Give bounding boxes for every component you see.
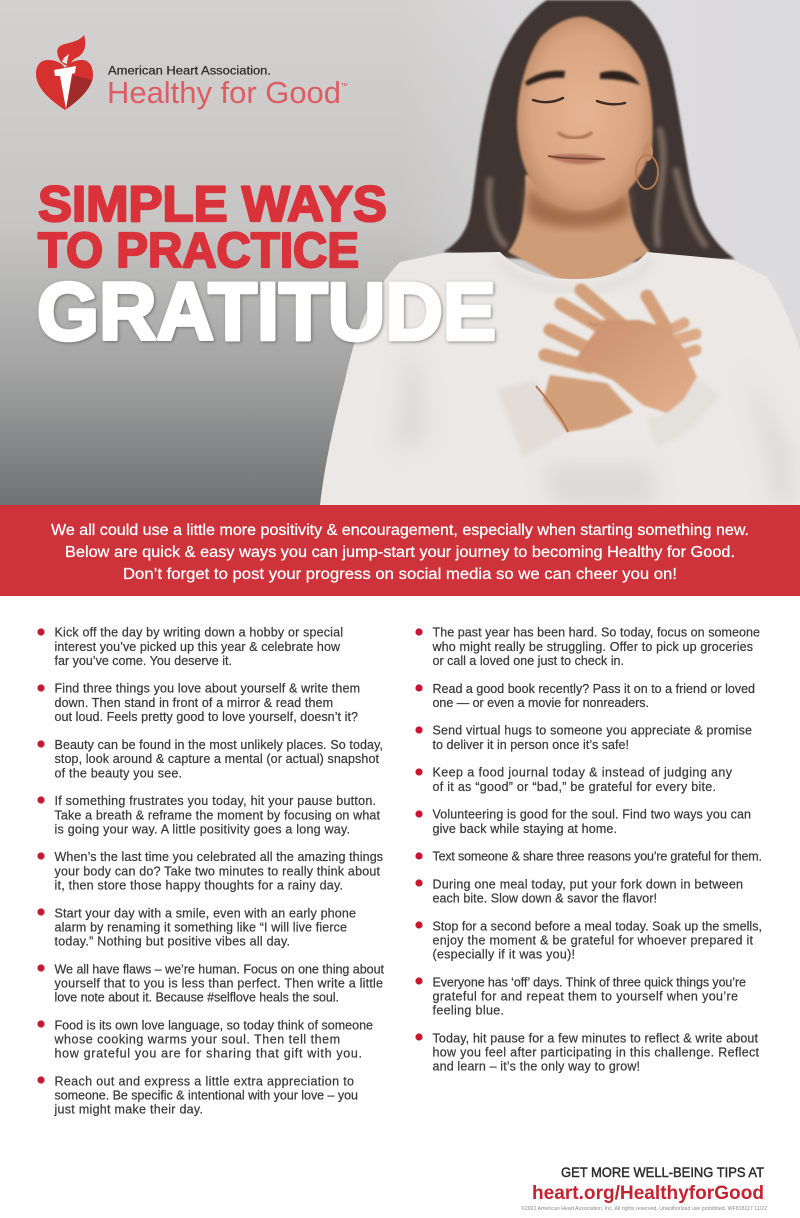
tip: pause button [37, 794, 381, 836]
cuff left [497, 380, 567, 457]
footer heading: GET MORE WELL-BEING TIPS AT [561, 1164, 764, 1180]
trademark: TM [341, 82, 348, 87]
tip: love yourself: out loud. Feels pretty good to love yourself, doesn’t it? [54, 710, 358, 724]
footer call to action [521, 1164, 767, 1212]
neck shadow [527, 185, 630, 228]
nose [558, 132, 592, 138]
footer url: heart.org/HealthyforGood [532, 1182, 764, 1204]
top hand palm [575, 320, 697, 413]
tip: flaws [37, 962, 385, 1004]
tip: beauty: of the beauty you see. [54, 766, 182, 780]
bracelet [536, 386, 568, 432]
copyright: ©2022 American Heart Association, Inc. All rights reserved. Unauthorized use prohibited. WF818117 11/22 [521, 1205, 767, 1212]
tip: off days: grateful for and repeat them to yourself when you’re [432, 990, 738, 1004]
tip: virtual hugs: Send virtual hugs to someone you appreciate & promise [432, 724, 752, 738]
forearm [543, 375, 633, 432]
logo text: Healthy for Good: Healthy for Good [107, 75, 341, 110]
closed eyes [533, 98, 625, 104]
tip: text someone: Text someone & share three reasons you’re grateful for them. [432, 850, 762, 864]
tip: beauty: Beauty can be found in the most unlikely places. So today, [54, 738, 383, 752]
top hand fingers and thumb [545, 290, 667, 367]
tip: food journal: Keep a food journal today & instead of judging any [432, 766, 733, 780]
tip: food journal: of it as “good” or “bad,” be grateful for every bite. [432, 780, 716, 794]
tip: good book [415, 682, 755, 710]
tip: virtual hugs [415, 724, 752, 752]
panel: right column tips [415, 626, 762, 1074]
earring [636, 155, 658, 189]
tip: food [37, 1018, 373, 1060]
lower hand fingers [670, 323, 696, 355]
tip: reflect [415, 1032, 760, 1074]
tip: good book: one — or even a movie for nonreaders. [432, 696, 649, 710]
tip: good book: Read a good book recently? Pass it on to a friend or loved [432, 682, 755, 696]
tip: smile [37, 906, 356, 948]
panel: left column tips [37, 626, 385, 1116]
ear [643, 143, 653, 161]
tip: someone struggling [415, 626, 760, 668]
tip: body: it, then store those happy thoughts for a rainy day. [54, 878, 343, 892]
neck [508, 175, 650, 282]
tip: food: whose cooking warms your soul. Then tell them [54, 1032, 340, 1046]
tip: someone struggling: or call a loved one just to check in. [432, 654, 624, 668]
tip: smile: today.” Nothing but positive vibes all day. [54, 934, 290, 948]
tip: beauty [37, 738, 383, 780]
ring [589, 322, 598, 325]
title line 2: TO PRACTICE [38, 224, 359, 278]
tip: appreciation: just might make their day. [54, 1102, 203, 1116]
tip: appreciation: someone. Be specific & intentional with your love – you [54, 1088, 358, 1102]
title line 3: GRATITUDE: GRATITUDE [37, 266, 496, 358]
tip: virtual hugs: to deliver it in person once it’s safe! [432, 738, 629, 752]
tip: food: Food is its own love language, so today think of someone [54, 1018, 373, 1032]
hands over heart [543, 290, 697, 432]
tip: off days [415, 976, 746, 1018]
face [517, 17, 653, 210]
tip: volunteering: Volunteering is good for the soul. Find two ways you can [432, 808, 751, 822]
icon: heart and torch [36, 35, 93, 110]
tip: soak up the smells [415, 920, 762, 962]
cuff right [647, 377, 720, 447]
tip: beauty: stop, look around & capture a mental (or actual) snapshot [54, 752, 380, 766]
tip: pause button: If something frustrates you today, hit your pause button. [54, 794, 376, 808]
title [37, 176, 496, 358]
tip: pause button: is going your way. A little positivity goes a long way. [54, 822, 350, 836]
tip: reflect: Today, hit pause for a few minutes to reflect & write about [432, 1032, 759, 1046]
eyebrows [525, 71, 640, 86]
tip: love yourself: down. Then stand in front of a mirror & read them [54, 696, 333, 710]
tip: flaws: love note about it. Because #selflove heals the soul. [54, 990, 339, 1004]
sweater [320, 252, 800, 505]
tip: off days: feeling blue. [432, 1004, 504, 1018]
panel: red intro banner: Below are quick & easy ways you can jump-start your journey to becoming Healthy for Good. [65, 544, 735, 561]
hero photo background [0, 0, 800, 505]
tip: fork down [415, 878, 743, 906]
tip: hobby: Kick off the day by writing down a hobby or special [54, 626, 343, 640]
tip: reflect: how you feel after participating in this challenge. Reflect [432, 1046, 760, 1060]
tip: love yourself: Find three things you love about yourself & write them [54, 682, 360, 696]
tip: hobby: interest you’ve picked up this year & celebrate how [54, 640, 341, 654]
tip: someone struggling: who might really be struggling. Offer to pick up groceries [432, 640, 753, 654]
logo: American Heart Association Healthy for Good [36, 35, 348, 110]
tip: reflect: and learn – it’s the only way to grow! [432, 1060, 640, 1074]
tip: fork down: During one meal today, put your fork down in between [432, 878, 743, 892]
tip: flaws: We all have flaws – we’re human. Focus on one thing about [54, 962, 385, 976]
tip: food: how grateful you are for sharing that gift with you. [54, 1046, 362, 1060]
tip: appreciation: Reach out and express a little extra appreciation to [54, 1074, 354, 1088]
hair [443, 0, 735, 262]
photo: woman with hands on heart [320, 0, 800, 505]
tip: appreciation [37, 1074, 358, 1116]
tip: hobby [37, 626, 343, 668]
tip: soak up the smells: Stop for a second before a meal today. Soak up the smells, [432, 920, 762, 934]
tip: food journal [415, 766, 733, 794]
panel: red intro banner: Don’t forget to post your progress on social media so we can cheer you on! [123, 566, 677, 583]
panel: red intro banner: We all could use a little more positivity & encouragement, especially when starting something new. [51, 522, 749, 539]
smile [548, 154, 605, 164]
tip: pause button: Take a breath & reframe the moment by focusing on what [54, 808, 381, 822]
tip: volunteering [415, 808, 751, 836]
title line 1: SIMPLE WAYS [38, 176, 387, 232]
tip: soak up the smells: (especially if it was you)! [432, 948, 575, 962]
tip: volunteering: give back while staying at home. [432, 822, 617, 836]
tip: smile: alarm by renaming it something like “I will live fierce [54, 920, 347, 934]
tip: off days: Everyone has ‘off’ days. Think of three quick things you’re [432, 976, 746, 990]
panel: red intro banner [0, 505, 800, 596]
tip: body [37, 850, 383, 892]
tip: body: your body can do? Take two minutes to really think about [54, 864, 381, 878]
tip: body: When’s the last time you celebrated all the amazing things [54, 850, 383, 864]
tip: flaws: yourself that to you is less than perfect. Then write a little [54, 976, 383, 990]
tip: hobby: far you’ve come. You deserve it. [54, 654, 232, 668]
tip: soak up the smells: enjoy the moment & be grateful for whoever prepared it [432, 934, 754, 948]
tip: fork down: each bite. Slow down & savor the flavor! [432, 892, 657, 906]
tip: love yourself [37, 682, 360, 724]
tip: smile: Start your day with a smile, even with an early phone [54, 906, 356, 920]
tip: someone struggling: The past year has been hard. So today, focus on someone [432, 626, 760, 640]
logo text: American Heart Association: American Heart Association. [108, 66, 271, 78]
